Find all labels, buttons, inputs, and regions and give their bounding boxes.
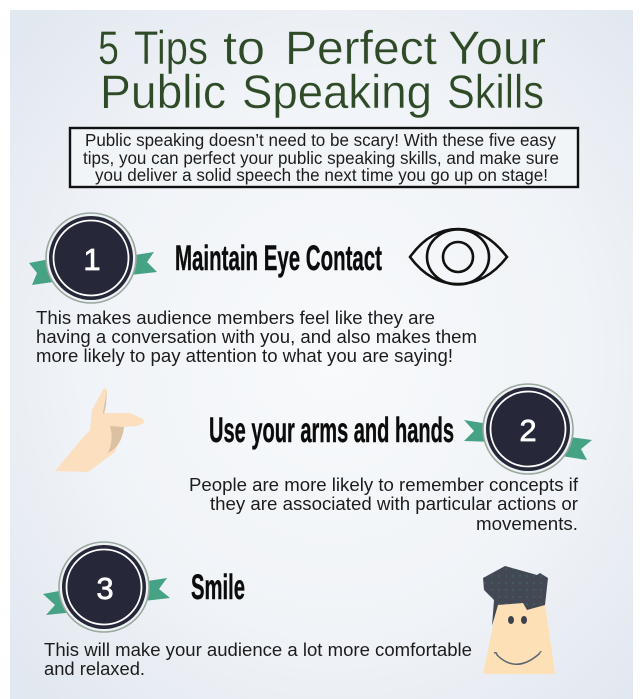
title (98, 21, 546, 118)
tip 3 text: and relaxed. (44, 658, 145, 679)
tip 2 text: they are associated with particular actions or (210, 493, 578, 514)
title: Public (100, 65, 226, 118)
tip 2 text (189, 474, 579, 534)
title: 5 (98, 21, 119, 74)
badge 3: 3 (96, 571, 114, 606)
title: Your (448, 21, 546, 74)
tip 2 text: People are more likely to remember concepts if (189, 474, 579, 495)
badge 3 (43, 542, 170, 632)
title: Perfect (285, 21, 437, 74)
title: Speaking (242, 65, 432, 118)
badge 2: 2 (519, 413, 537, 448)
badge 1: 1 (83, 242, 101, 277)
tip 1 text (36, 307, 477, 366)
heading: maintain eye contact: Maintain Eye Contact (175, 239, 382, 278)
intro text box: tips, you can perfect your public speaking skills, and make sure (83, 148, 559, 168)
heading: smile: Smile (191, 568, 245, 607)
tip 3 text (44, 639, 472, 679)
title: to (223, 21, 265, 74)
icon: smiling face (483, 566, 555, 674)
tip 1 text: This makes audience members feel like they are (36, 307, 435, 328)
intro text box: you deliver a solid speech the next time you go up on stage! (95, 165, 548, 185)
icon: eye (410, 229, 507, 284)
tip 1 text: more likely to pay attention to what you are saying! (36, 345, 453, 366)
title: Tips (134, 21, 208, 74)
title: Skills (447, 65, 544, 118)
heading: use your arms and hands: Use your arms and hands (209, 411, 454, 450)
icon: pointing hand (55, 388, 144, 472)
badge 2 (464, 384, 592, 474)
intro text box (70, 128, 578, 187)
intro text box: Public speaking doesn’t need to be scary! With these five easy (85, 130, 556, 150)
tip 3 text: This will make your audience a lot more comfortable (44, 639, 472, 660)
badge 1 (29, 213, 157, 303)
tip 1 text: having a conversation with you, and also makes them (36, 326, 477, 347)
tip 2 text: movements. (476, 513, 578, 534)
